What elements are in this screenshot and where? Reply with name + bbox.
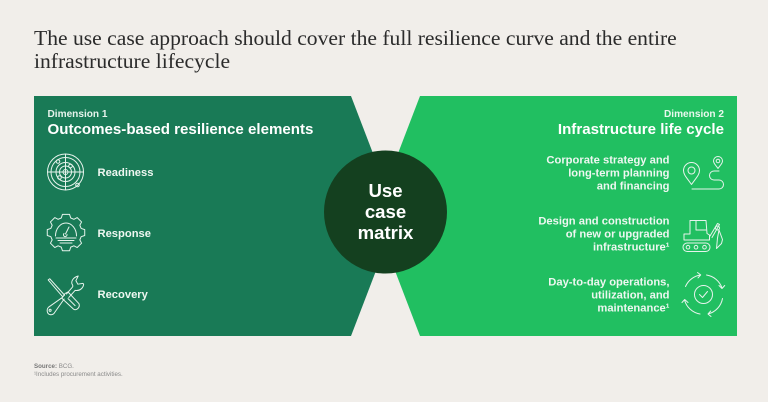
text: corporate strategy: and financing bbox=[597, 180, 670, 192]
text: corporate strategy: Corporate strategy and bbox=[546, 154, 670, 166]
footnotes: ¹Includes procurement activities. bbox=[34, 371, 123, 378]
dimension 2 label: Dimension 2 bbox=[664, 109, 724, 120]
title: The use case approach should cover the full resilience curve and the entire bbox=[34, 26, 677, 50]
footnotes bbox=[34, 363, 123, 378]
center circle: case bbox=[365, 201, 406, 222]
text: design and construction: infrastructure¹ bbox=[593, 242, 670, 254]
icon: gear with gauge bbox=[47, 214, 85, 251]
label: recovery: Recovery bbox=[98, 289, 149, 301]
dimension 1 label: Dimension 1 bbox=[48, 109, 108, 120]
text: design and construction: of new or upgraded bbox=[566, 228, 670, 240]
dimension 1 heading: Outcomes-based resilience elements bbox=[48, 121, 313, 138]
panel: dimension 2 bbox=[374, 96, 737, 336]
text: design and construction: Design and construction bbox=[538, 216, 670, 228]
text: day-to-day operations bbox=[548, 276, 670, 314]
label: response: Response bbox=[98, 228, 151, 240]
text: day-to-day operations: maintenance¹ bbox=[597, 302, 670, 314]
icon: cycle with check bbox=[682, 272, 725, 316]
center label: Use bbox=[368, 180, 403, 201]
icon: excavator bbox=[683, 220, 722, 252]
text: corporate strategy: long-term planning bbox=[568, 168, 670, 180]
text: day-to-day operations: utilization, and bbox=[591, 290, 670, 302]
text: day-to-day operations: Day-to-day operations, bbox=[548, 276, 670, 288]
title bbox=[34, 26, 677, 73]
title: infrastructure lifecycle bbox=[34, 49, 230, 73]
dimension 2 heading: Infrastructure life cycle bbox=[558, 121, 724, 138]
center circle: matrix bbox=[358, 222, 414, 243]
icon: radar bbox=[48, 154, 84, 190]
text: design and construction bbox=[538, 216, 670, 254]
icon: route with map pins bbox=[684, 156, 724, 189]
text: corporate strategy bbox=[546, 154, 670, 192]
footnotes: Source: BCG. bbox=[34, 363, 74, 370]
center circle bbox=[324, 150, 447, 274]
panel: dimension 1 bbox=[34, 96, 397, 336]
label: readiness: Readiness bbox=[98, 167, 153, 179]
icon: crossed wrench and screwdriver bbox=[47, 276, 84, 315]
